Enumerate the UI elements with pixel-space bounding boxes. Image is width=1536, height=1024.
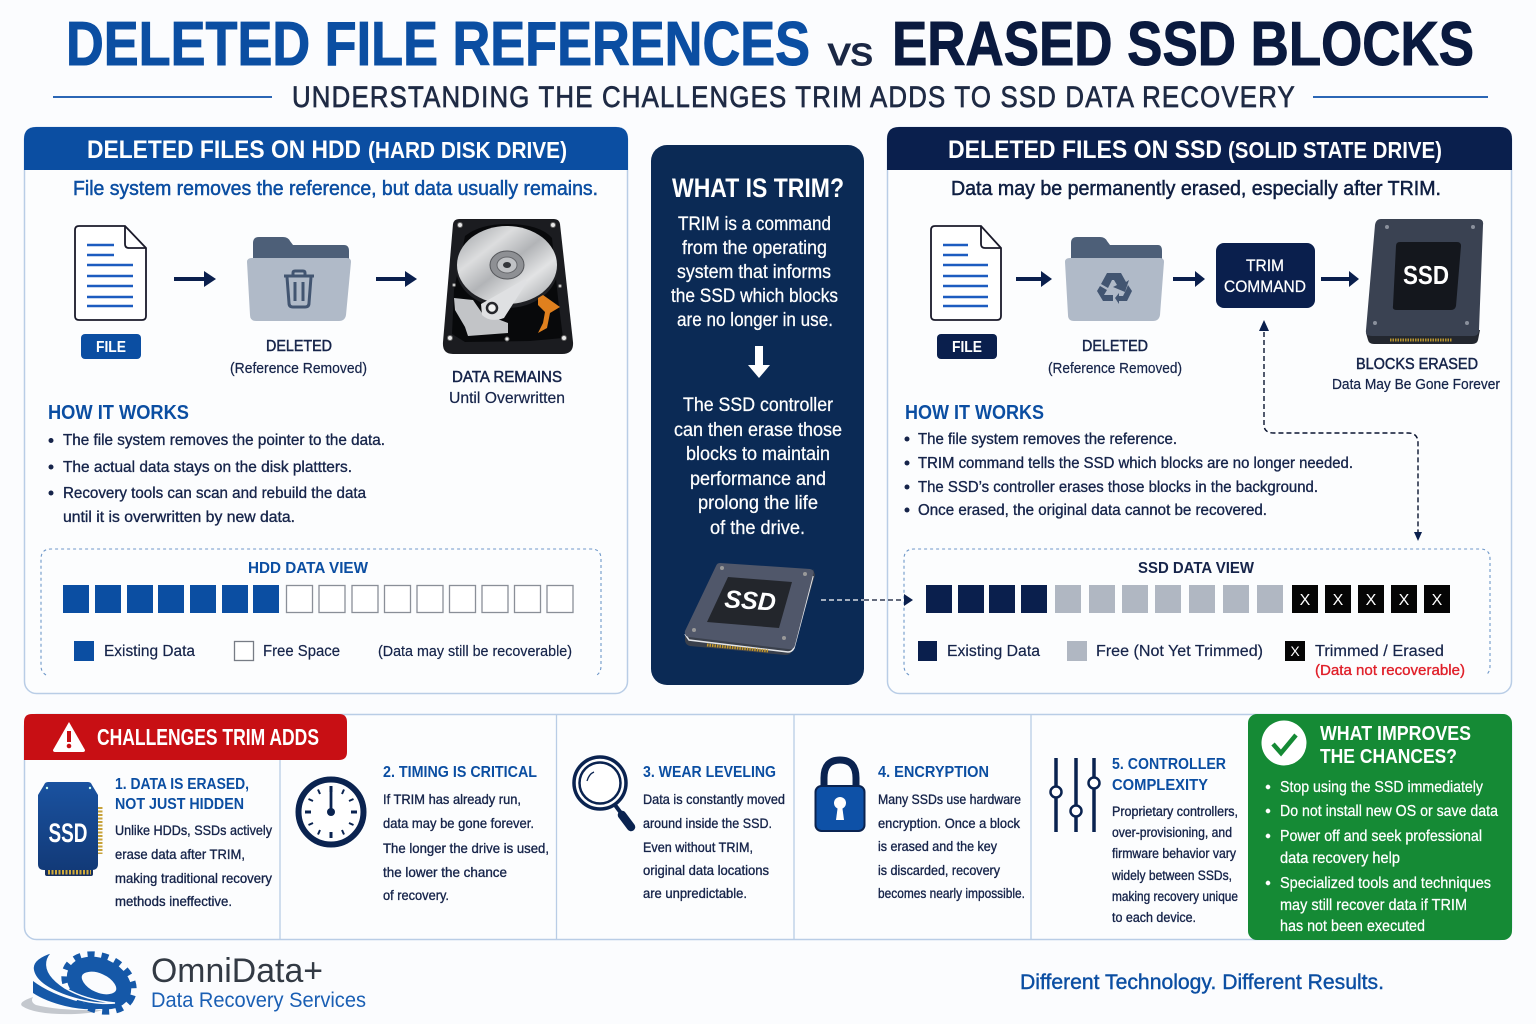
label: deleted: DELETED [266,338,332,355]
challenge 1 [38,776,272,909]
label: blocks erased: Data May Be Gone Forever [1332,376,1500,393]
bullet list [904,431,1353,519]
challenge 4: becomes nearly impossible. [878,885,1025,901]
TRIM result text: can then erase those [674,420,842,441]
TRIM definition: TRIM is a command [678,214,831,235]
trimmed erased blocks: X [1333,592,1344,609]
icon: clock [298,780,364,844]
legend: Trimmed / Erased [1315,643,1444,660]
HDD data view [41,549,601,675]
bullet list: The file system removes the reference. [918,431,1177,448]
heading: how it works: HOW IT WORKS [905,402,1044,424]
label: deleted: (Reference Removed) [230,360,367,377]
icon: file [75,226,146,320]
TRIM result text [674,395,842,539]
label: blocks erased: BLOCKS ERASED [1356,356,1478,373]
SSD panel subtitle: Data may be permanently erased, especially after TRIM. [951,178,1441,200]
bullet list [48,432,385,526]
icon: SSD chip [685,563,815,655]
arrow [376,271,417,287]
trimmed erased blocks: X [1366,592,1377,609]
FILE badge: FILE [96,339,126,356]
icon: folder with trash [247,237,351,321]
legend: Free (Not Yet Trimmed) [1096,643,1263,660]
arrow: down [748,346,770,378]
legend: Existing Data [104,643,195,660]
HDD panel subtitle: File system removes the reference, but data usually remains. [73,178,598,200]
TRIM command box: COMMAND [1224,277,1306,296]
TRIM command box [1216,243,1315,308]
subtitle: UNDERSTANDING THE CHALLENGES TRIM ADDS TO SSD DATA RECOVERY [292,80,1295,113]
icon: check mark [1262,720,1306,766]
HDD panel header: (HARD DISK DRIVE) [368,137,567,163]
challenge 4: Many SSDs use hardware [878,791,1021,807]
free space blocks [286,586,573,612]
challenge 2: 2. TIMING IS CRITICAL [383,764,537,781]
challenge 5: widely between SSDs, [1111,868,1232,883]
challenge 2 [298,764,549,903]
icon: SSD chip [38,782,100,876]
arrow [1016,271,1052,287]
legend [918,641,1465,679]
challenge 4: encryption. Once a block [878,815,1021,831]
title [66,10,1474,79]
footer logo: OmniData+: Data Recovery Services [151,989,366,1012]
bullet list: has not been executed [1280,918,1425,935]
challenge 3: original data locations [643,862,769,878]
bullet list: Do not install new OS or save data [1280,803,1498,820]
label: deleted: DELETED [1082,338,1148,355]
footer logo: OmniData+: OmniData+ [151,952,323,990]
icon: SSD drive: SSD [1403,260,1449,290]
free not yet trimmed blocks [1055,585,1283,613]
HDD panel header [24,127,628,170]
challenge 5 [1050,756,1238,925]
bullet list: may still recover data if TRIM [1280,897,1467,914]
challenge 3: around inside the SSD. [643,815,772,831]
TRIM definition: are no longer in use. [677,310,833,331]
label: deleted [1048,338,1182,377]
TRIM result text: The SSD controller [683,395,834,416]
label: deleted: (Reference Removed) [1048,360,1182,377]
heading: how it works: HOW IT WORKS [48,402,189,424]
SSD data view [904,549,1490,679]
challenge 3: 3. WEAR LEVELING [643,764,776,781]
challenge 2: the lower the chance [383,864,507,880]
challenge 3: Even without TRIM, [643,839,753,855]
challenge 5: firmware behavior vary [1112,846,1236,861]
HDD data view: HDD DATA VIEW [248,560,369,577]
challenge 3: Data is constantly moved [643,791,785,807]
challenge 4: 4. ENCRYPTION [878,764,989,781]
tagline: Different Technology. Different Results. [1020,971,1384,994]
panel: what improves the chances [1248,714,1512,940]
TRIM definition: the SSD which blocks [671,286,838,307]
title: DELETED FILE REFERENCES [66,10,810,79]
icon: folder with recycle symbol [1065,237,1164,321]
icon: SSD chip: SSD [724,585,777,617]
challenge 1: methods ineffective. [115,893,232,909]
challenge 1: erase data after TRIM, [115,846,245,862]
bullet list: Power off and seek professional [1280,828,1482,845]
panel: what is TRIM [651,145,864,685]
TRIM definition: system that informs [677,262,831,283]
challenge 1: Unlike HDDs, SSDs actively [115,822,272,838]
red heading tab [24,714,347,760]
label: data remains: DATA REMAINS [452,369,562,386]
icon: hard disk drive [443,219,573,354]
challenge 3: are unpredictable. [643,885,747,901]
legend: Free Space [263,643,340,660]
TRIM result text: blocks to maintain [686,444,830,465]
label: data remains [449,369,565,407]
legend: X [1290,643,1300,659]
panel: SSD deleted files [887,127,1512,694]
label: deleted [230,338,367,377]
legend: (Data may still be recoverable) [378,643,572,660]
icon: magnifying glass [574,757,631,827]
TRIM result text: of the drive. [710,518,805,539]
panel: HDD deleted files [24,127,628,694]
FILE badge [81,334,141,359]
panel: challenges TRIM adds [24,714,1512,940]
challenge 1: NOT JUST HIDDEN [115,796,244,813]
legend [74,641,572,661]
challenge 3 [574,757,785,901]
trimmed erased blocks: X [1432,592,1443,609]
challenge 5: making recovery unique [1112,889,1238,904]
challenge 4: is erased and the key [878,838,997,854]
challenge 1: making traditional recovery [115,870,272,886]
SSD data view: SSD DATA VIEW [1138,560,1255,577]
challenge 2: of recovery. [383,887,449,903]
TRIM definition: from the operating [682,238,827,259]
footer logo: OmniData+ [21,944,366,1022]
HDD panel header: DELETED FILES ON HDD [87,136,361,164]
arrow [174,271,216,287]
panel: what improves the chances: WHAT IMPROVES [1320,722,1471,745]
trimmed erased blocks: X [1300,592,1311,609]
bullet list: TRIM command tells the SSD which blocks are no longer needed. [918,455,1353,472]
bullet list: The file system removes the pointer to the data. [63,432,385,449]
arrow [1321,271,1359,287]
challenge 2: data may be gone forever. [383,815,534,831]
bullet list: Recovery tools can scan and rebuild the data [63,485,366,502]
arrow: SSD to data view [821,594,913,606]
logo mark [21,944,143,1022]
icon: padlock [816,760,864,831]
dashed connector arrow [1259,320,1422,541]
panel: what is TRIM: WHAT IS TRIM? [672,173,844,203]
legend: (Data not recoverable) [1315,662,1465,679]
FILE badge [937,334,997,359]
bullet list [1266,779,1498,935]
icon: sliders [1050,758,1100,832]
label: blocks erased [1332,356,1500,393]
challenge 2: If TRIM has already run, [383,791,521,807]
red heading tab: CHALLENGES TRIM ADDS [97,724,319,750]
TRIM result text: prolong the life [698,493,818,514]
challenge 4: is discarded, recovery [878,862,1000,878]
bullet list: Once erased, the original data cannot be recovered. [918,502,1267,519]
challenge 1: 1. DATA IS ERASED, [115,776,249,793]
SSD panel header: DELETED FILES ON SSD [948,136,1222,164]
FILE badge: FILE [952,339,982,356]
SSD panel header: (SOLID STATE DRIVE) [1228,137,1442,163]
challenge 4 [816,760,1025,901]
bullet list: until it is overwritten by new data. [63,509,295,526]
challenge 5: to each device. [1112,910,1196,925]
arrow [1173,271,1205,287]
challenge 5: COMPLEXITY [1112,777,1208,794]
bullet list: Specialized tools and techniques [1280,875,1491,892]
challenge 5: 5. CONTROLLER [1112,756,1226,773]
icon: SSD drive [1366,219,1483,344]
existing data blocks [926,585,1047,613]
TRIM definition [671,214,838,331]
icon: file [931,226,1001,320]
challenge 5: Proprietary controllers, [1112,804,1238,819]
existing data blocks [63,585,279,613]
legend: Existing Data [947,643,1040,660]
bullet list: data recovery help [1280,850,1400,867]
TRIM result text: performance and [690,469,826,490]
trimmed erased blocks [1292,585,1450,613]
panel: what improves the chances: THE CHANCES? [1320,745,1457,768]
challenge 2: The longer the drive is used, [383,840,549,856]
SSD panel header [887,127,1512,170]
bullet list: The actual data stays on the disk plattters. [63,459,352,476]
bullet list: The SSD’s controller erases those blocks in the background. [918,479,1318,496]
challenge 5: over-provisioning, and [1112,825,1232,840]
bullet list: Stop using the SSD immediately [1280,779,1483,796]
title: vs [828,30,873,74]
label: data remains: Until Overwritten [449,390,565,407]
trimmed erased blocks: X [1399,592,1410,609]
TRIM command box: TRIM [1246,256,1284,275]
icon: SSD chip: SSD [48,818,88,848]
